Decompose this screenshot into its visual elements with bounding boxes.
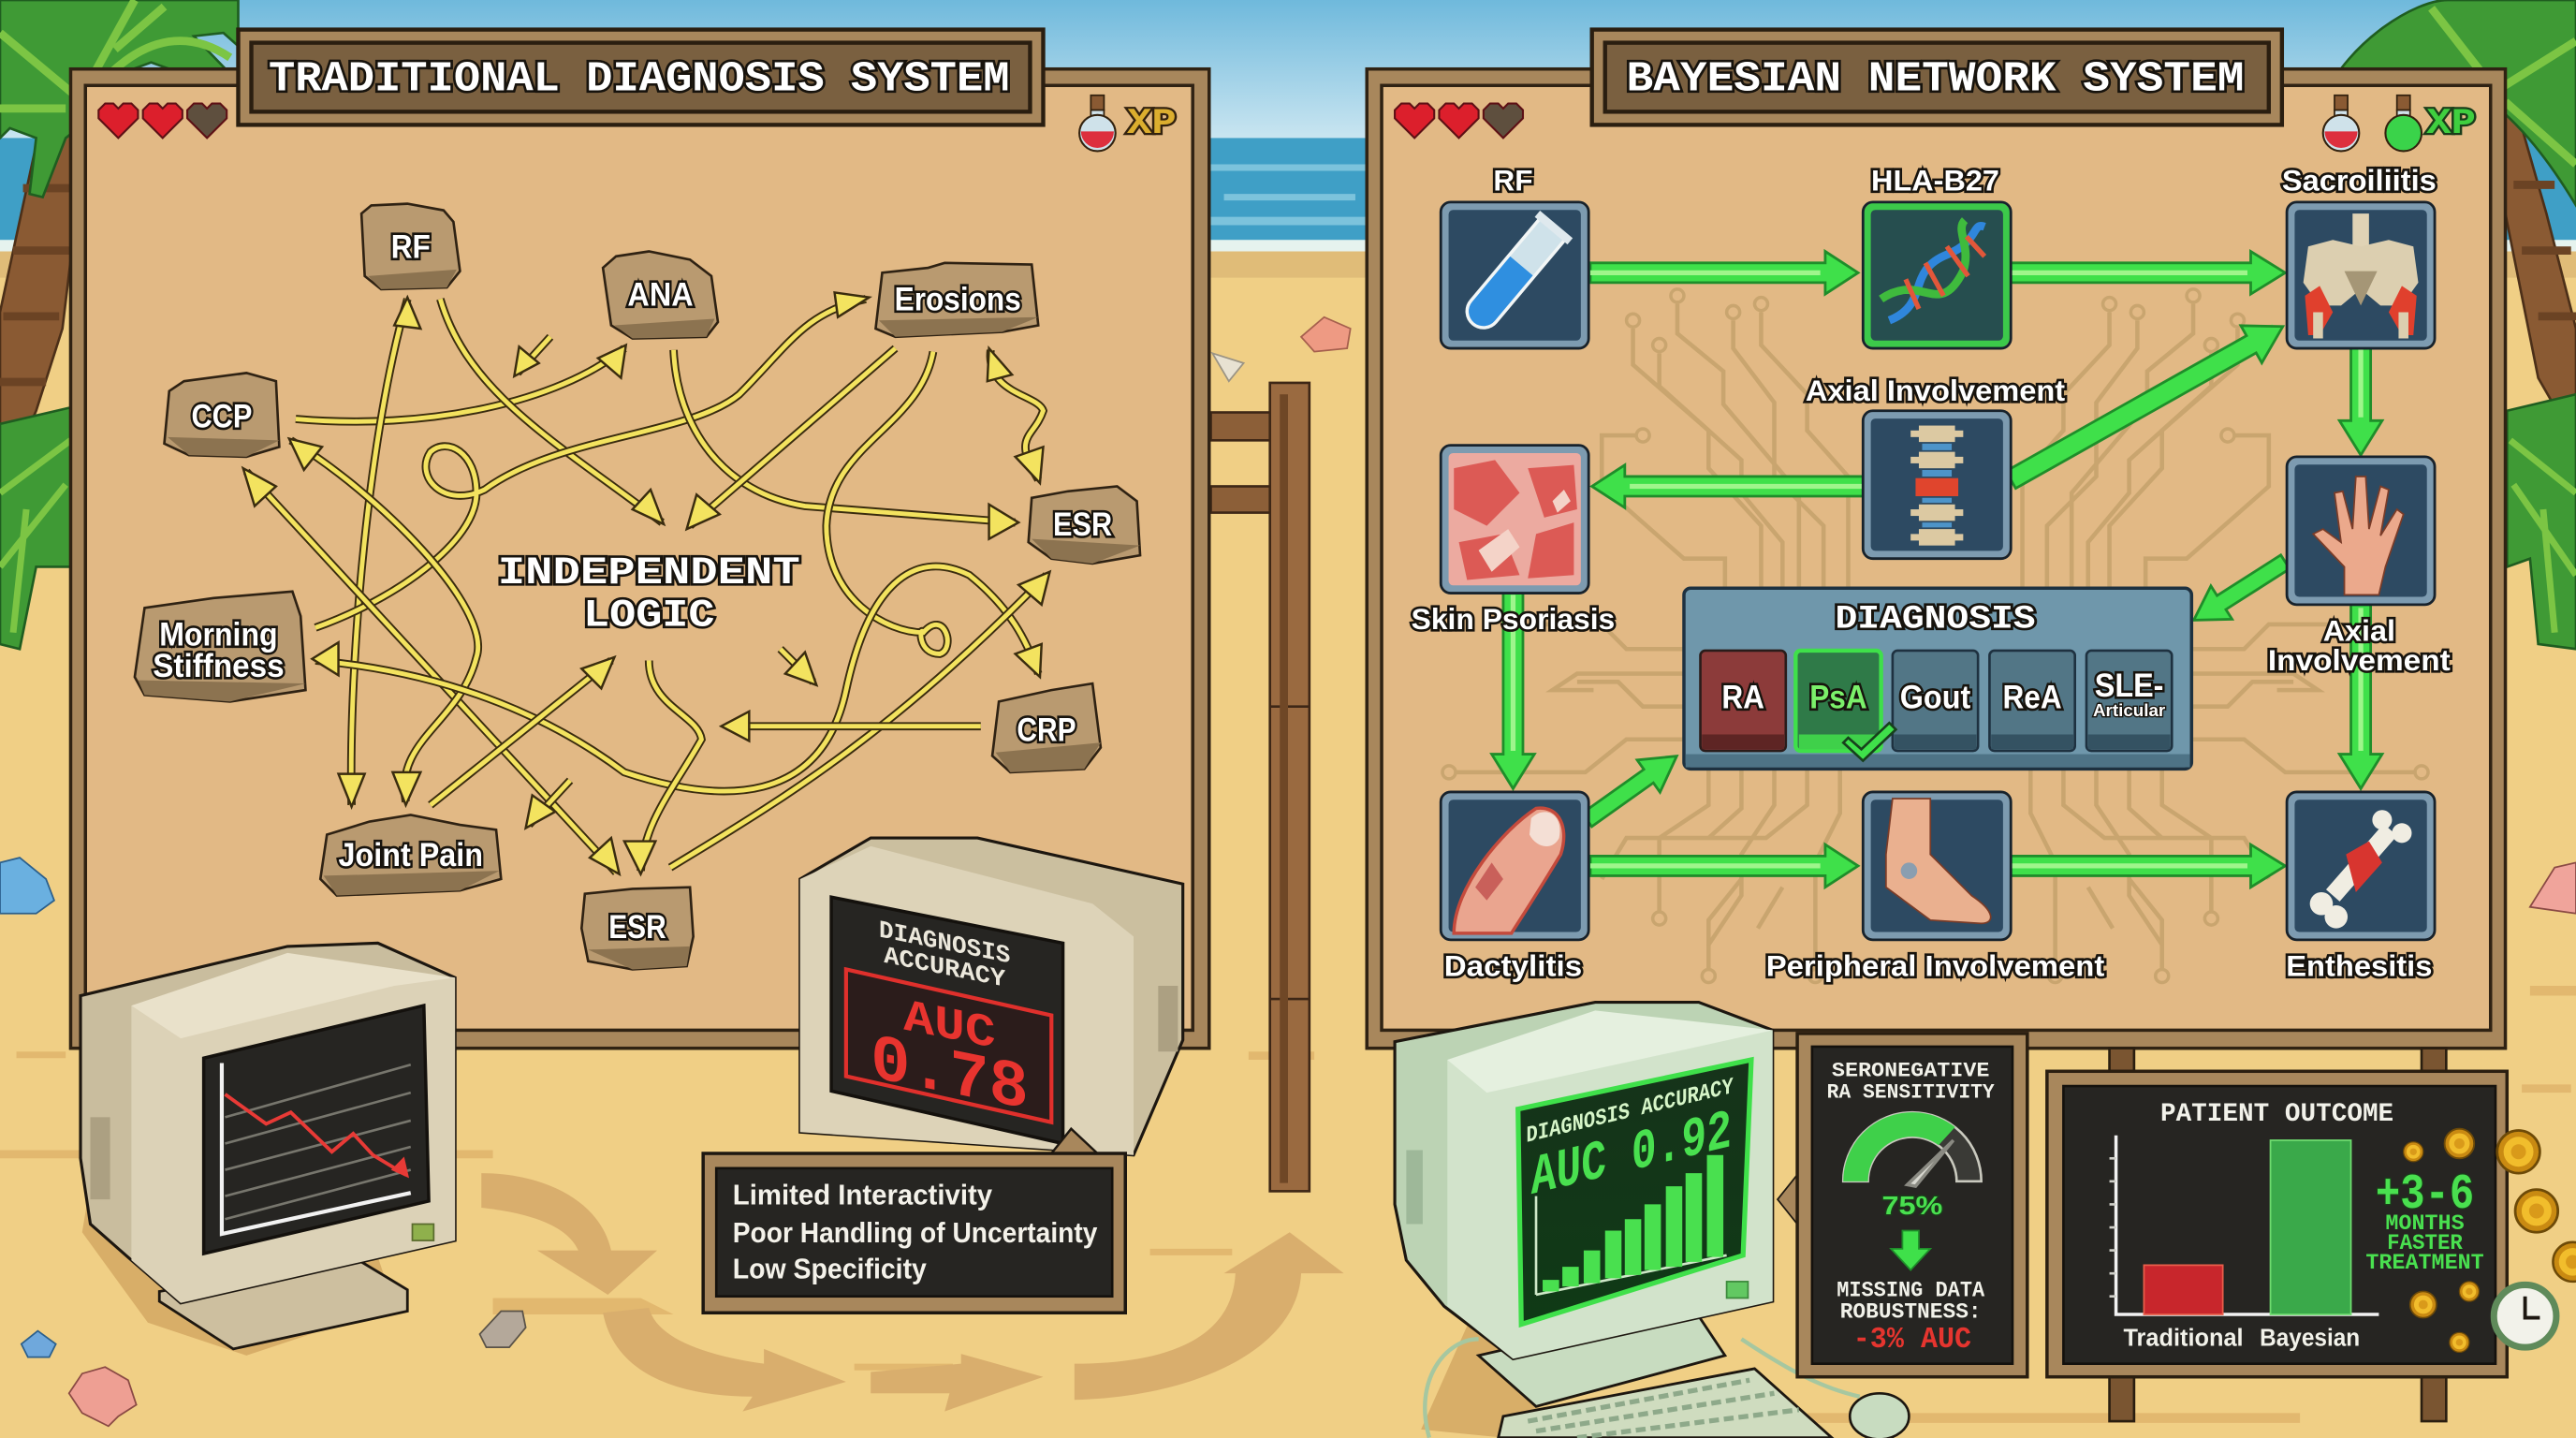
callout: limitations: Low Specificity [733, 1252, 927, 1284]
button: ReA [1989, 651, 2075, 751]
node: HLA-B27 DNA: HLA-B27 [1871, 164, 1999, 198]
node: ANA: ANA [627, 276, 694, 313]
shells and stones [0, 317, 2576, 1426]
tangled arrows [243, 292, 1050, 874]
node: ESR right [1029, 486, 1140, 564]
monitor: AUC 0.92: AUC 0.92 [1531, 1101, 1732, 1211]
potions and XP: right [2323, 95, 2476, 151]
gauge [1843, 1112, 1982, 1186]
panel frame [70, 69, 1209, 1049]
panel: sensitivity and robustness: SERONEGATIVE [1832, 1060, 1989, 1083]
node: ESR bottom: ESR [608, 909, 666, 946]
potion and XP: left [1079, 95, 1177, 151]
diagnosis panel [1684, 588, 2191, 769]
monitor: AUC 0.78: AUC [903, 991, 996, 1062]
panel: sensitivity and robustness: -3% AUC [1853, 1324, 1971, 1357]
node: RF [361, 204, 460, 289]
title banner: bayesian network system: BAYESIAN NETWORK SYSTEM [1627, 55, 2244, 104]
monitor: declining trend chart [80, 943, 455, 1349]
palm tree: bottom left [0, 407, 70, 649]
panel: patient outcome [2047, 1049, 2576, 1421]
monitor: AUC 0.92 [1395, 1003, 1773, 1406]
center label: independent logic: LOGIC [583, 594, 714, 638]
hearts: right [1395, 104, 1523, 138]
callout: months faster: FASTER [2387, 1231, 2463, 1255]
callout: months faster [2365, 1167, 2484, 1275]
bar chart [2110, 1136, 2378, 1351]
node: ESR bottom [581, 888, 694, 969]
node: Skin Psoriasis [1412, 446, 1615, 636]
node: Axial Involvement hand: Involvement [2268, 643, 2451, 677]
node: CCP: CCP [191, 398, 252, 434]
button: SLE-Articular [2086, 651, 2172, 751]
node: Morning Stiffness [135, 592, 305, 701]
bar chart: Bayesian [2260, 1323, 2360, 1351]
node: Skin Psoriasis: Skin Psoriasis [1412, 602, 1615, 636]
panel: sensitivity and robustness [1778, 1034, 2027, 1377]
node: Axial Involvement spine: Axial Involvement [1806, 374, 2066, 407]
node: Dactylitis finger [1441, 792, 1588, 982]
node: Joint Pain [320, 814, 501, 895]
button: RA [1701, 651, 1786, 751]
down arrow [1891, 1231, 1930, 1270]
panel frame [1367, 69, 2506, 1049]
monitor: AUC 0.78: 0.78 [871, 1023, 1029, 1129]
coins [2404, 1129, 2576, 1352]
title banner: traditional diagnosis system: TRADITIONAL DIAGNOSIS SYSTEM [269, 55, 1010, 104]
callout: limitations: Limited Interactivity [733, 1178, 992, 1211]
title banner: traditional diagnosis system [238, 30, 1043, 125]
center label: independent logic: INDEPENDENT [498, 550, 800, 595]
node: HLA-B27 DNA [1863, 164, 2011, 348]
button: PsA [1795, 651, 1881, 751]
node: Dactylitis finger: Dactylitis [1444, 948, 1582, 982]
callout: limitations [703, 1129, 1125, 1313]
button: Gout [1893, 651, 1978, 751]
panel: bayesian network system [1367, 69, 2506, 1049]
monitor: AUC 0.78: DIAGNOSIS [879, 917, 1010, 970]
potions and XP: right: XP [2426, 103, 2476, 144]
panel: sensitivity and robustness: ROBUSTNESS: [1840, 1300, 1982, 1325]
node: CRP: CRP [1017, 712, 1076, 749]
icon: clock [2494, 1284, 2556, 1347]
node: ANA [603, 252, 718, 339]
panel: patient outcome: PATIENT OUTCOME [2160, 1100, 2393, 1129]
button: Gout: Gout [1900, 679, 1971, 715]
palm tree: top left [0, 0, 238, 493]
callout: months faster: +3-6 [2376, 1167, 2474, 1223]
panel: sensitivity and robustness: RA SENSITIVITY [1827, 1080, 1996, 1104]
node: CRP [992, 683, 1101, 772]
node: Axial Involvement hand: Axial [2323, 613, 2395, 647]
node: Erosions [875, 263, 1038, 337]
palm tree: top right [2323, 0, 2576, 444]
node: Enthesitis bone: Enthesitis [2286, 948, 2432, 982]
circuit traces [1442, 289, 2428, 983]
network arrows [1492, 252, 2382, 888]
hearts: left [98, 104, 227, 138]
palm tree: bottom right [2507, 394, 2576, 649]
title banner: bayesian network system [1592, 30, 2282, 125]
button: PsA: PsA [1809, 679, 1867, 715]
panel: sensitivity and robustness: MISSING DATA [1837, 1279, 1984, 1303]
diagnosis panel: DIAGNOSIS [1835, 600, 2036, 638]
button: RA: RA [1721, 679, 1764, 715]
button: ReA: ReA [2002, 679, 2062, 715]
panel: traditional diagnosis system [70, 69, 1209, 1049]
node: Peripheral Involvement foot: Peripheral Involvement [1766, 948, 2105, 982]
node: Erosions: Erosions [895, 282, 1021, 318]
node: Sacroiliitis pelvis [2282, 164, 2437, 348]
monitor: AUC 0.92: DIAGNOSIS ACCURACY [1526, 1074, 1734, 1150]
button: SLE-Articular: SLE- [2095, 668, 2163, 704]
monitor: AUC 0.78 [800, 838, 1183, 1155]
node: ESR right: ESR [1053, 506, 1112, 543]
node: RF test tube: RF [1493, 164, 1533, 198]
node: Joint Pain: Joint Pain [339, 837, 483, 873]
fence between panels [1211, 383, 1310, 1191]
node: Axial Involvement hand [2268, 457, 2451, 677]
center label: independent logic [498, 550, 800, 638]
monitor: AUC 0.78: ACCURACY [884, 942, 1005, 994]
button: SLE-Articular: Articular [2093, 700, 2165, 720]
node: Morning Stiffness: Stiffness [153, 648, 285, 684]
potion and XP: left: XP [1127, 103, 1177, 144]
bar chart: Traditional [2123, 1323, 2244, 1351]
icon: check mark [1843, 723, 1895, 761]
node: RF: RF [391, 229, 431, 266]
node: Enthesitis bone [2286, 792, 2435, 982]
node: Sacroiliitis pelvis: Sacroiliitis [2282, 164, 2437, 198]
node: Axial Involvement spine [1806, 374, 2066, 559]
keyboard and mouse [1425, 1339, 1909, 1438]
node: CCP [165, 373, 279, 457]
sand arrows [481, 1173, 1344, 1412]
node: RF test tube [1441, 164, 1588, 348]
node: Morning Stiffness: Morning [159, 617, 278, 653]
panel: sensitivity and robustness: 75% [1881, 1191, 1942, 1220]
callout: months faster: MONTHS [2385, 1211, 2465, 1236]
callout: limitations: Poor Handling of Uncertainty [733, 1216, 1097, 1249]
callout: months faster: TREATMENT [2365, 1251, 2484, 1275]
node: Peripheral Involvement foot [1766, 792, 2105, 982]
